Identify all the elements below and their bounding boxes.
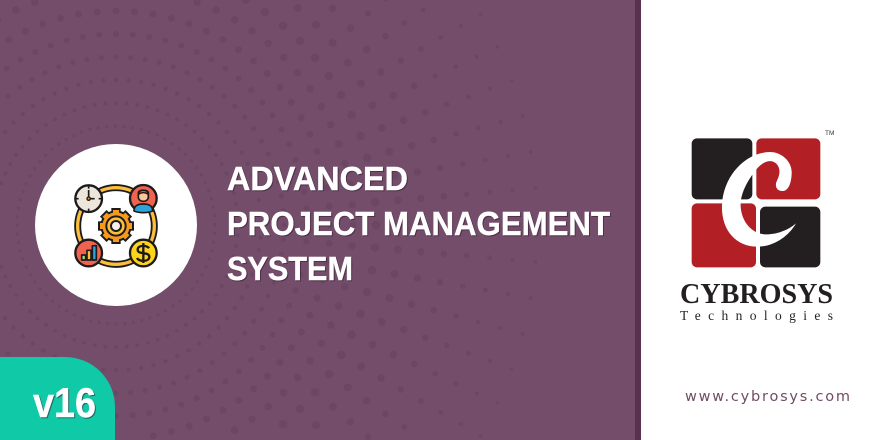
panel: right white column <box>641 0 880 440</box>
title line 1: ADVANCED <box>227 160 408 197</box>
version badge shape <box>0 357 115 440</box>
logo: trademark: TM <box>825 130 834 137</box>
title line 3: SYSTEM <box>227 250 353 287</box>
logo: white script C <box>722 152 796 247</box>
logo: black bottom-right tile <box>760 207 820 267</box>
panel: purple background <box>0 0 635 440</box>
logo: red top-right tile <box>756 138 820 199</box>
website url: www.cybrosys.com <box>685 389 850 405</box>
title <box>227 160 610 287</box>
icon badge circle <box>35 144 197 306</box>
icon: yellow ring <box>78 188 154 264</box>
icon: person <box>130 185 157 213</box>
icon: project management cycle <box>75 185 157 266</box>
icon: dollar coin <box>130 240 157 266</box>
logo: company name: CYBROSYS <box>680 278 833 310</box>
icon: clock <box>75 185 102 212</box>
divider stripe <box>635 0 641 440</box>
logo: tagline: Technologies <box>680 308 833 323</box>
icon: ring outline <box>78 188 154 264</box>
logo: black top-left tile <box>692 138 752 199</box>
logo: red bottom-left tile <box>692 203 756 267</box>
logo: cybrosys mark <box>692 138 820 267</box>
icon: bar chart <box>75 240 102 266</box>
version label: v16 <box>33 379 96 426</box>
title line 2: PROJECT MANAGEMENT <box>227 205 610 242</box>
icon: gear <box>98 208 134 244</box>
